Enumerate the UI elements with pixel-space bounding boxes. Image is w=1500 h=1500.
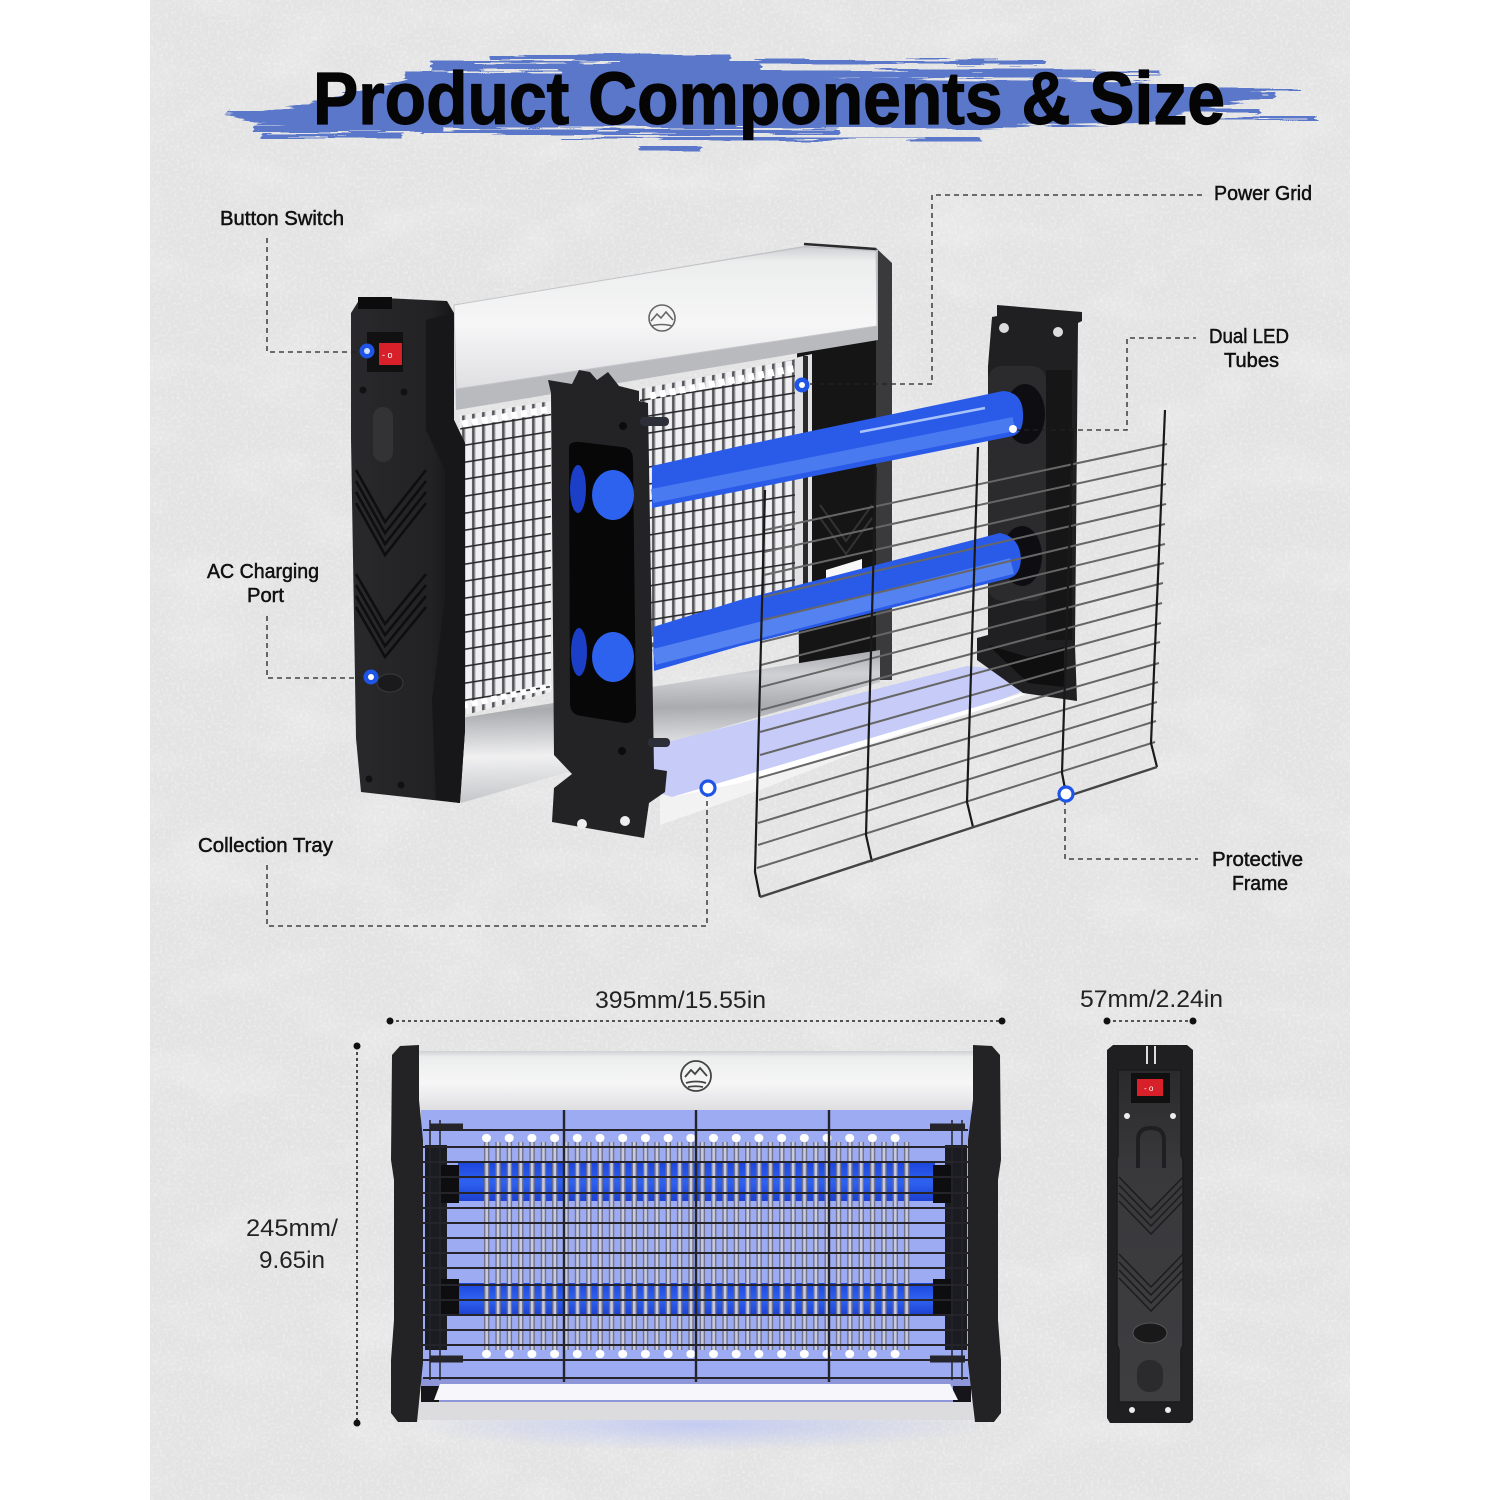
top aluminium bar	[454, 244, 878, 410]
protective frame	[755, 410, 1167, 897]
front view of product	[391, 1045, 1001, 1451]
icon: brand logo front	[681, 1061, 711, 1091]
rear end cap	[797, 248, 892, 680]
label: power grid: Power Grid	[1214, 183, 1312, 205]
label: dual LED tubes: Tubes	[1224, 350, 1279, 372]
callout dots	[360, 344, 1073, 801]
icon: brand logo	[649, 305, 675, 331]
left and right black end caps	[391, 1045, 1001, 1422]
icon: red switch: - o	[382, 350, 393, 360]
title: Product Components & Size	[313, 57, 1225, 140]
white clip on rear	[826, 559, 862, 582]
label: AC charging port: AC Charging	[207, 561, 319, 583]
switch housing side	[1131, 1073, 1170, 1103]
leader lines	[267, 195, 1205, 926]
side view of product	[1107, 1045, 1193, 1423]
LED tubes front	[441, 1163, 951, 1316]
blue brush stroke behind title	[226, 55, 1316, 150]
icon: red switch	[379, 343, 402, 365]
dual LED tubes	[652, 391, 1023, 671]
protective wires front	[423, 1110, 968, 1382]
label: button switch: Button Switch	[220, 208, 344, 230]
front view dimension: height: 9.65in	[259, 1247, 325, 1274]
label: AC charging port	[207, 561, 319, 607]
power grid	[460, 354, 812, 715]
side view dimension: depth	[1080, 986, 1223, 1024]
label: protective frame	[1212, 849, 1303, 895]
icon: red switch side: - o	[1144, 1084, 1154, 1093]
label: dual LED tubes	[1209, 326, 1289, 372]
front view dimension: width	[386, 987, 1006, 1024]
side view dimension: depth: 57mm/2.24in	[1080, 986, 1223, 1013]
label: protective frame: Frame	[1232, 873, 1288, 895]
front view dimension: height	[246, 1042, 360, 1426]
collection tray front	[417, 1384, 973, 1420]
front view dimension: height: 245mm/	[246, 1215, 338, 1242]
icon: red switch side	[1137, 1079, 1163, 1096]
bottom rail and white glow	[461, 650, 1060, 825]
label: protective frame: Protective	[1212, 849, 1303, 871]
glowing interior	[421, 1108, 971, 1390]
label: AC charging port: Port	[247, 585, 284, 607]
front view dimension: width: 395mm/15.55in	[595, 987, 766, 1014]
switch housing	[367, 332, 403, 372]
label: collection tray: Collection Tray	[198, 835, 333, 857]
collection tray	[650, 666, 1063, 797]
label: dual LED tubes: Dual LED	[1209, 326, 1289, 348]
right bracket	[977, 305, 1082, 701]
white top bar front	[415, 1051, 975, 1110]
exploded view of product	[351, 244, 1167, 897]
left end cap with switch	[351, 297, 465, 803]
power grid front	[482, 1138, 910, 1354]
front bracket	[548, 370, 670, 838]
